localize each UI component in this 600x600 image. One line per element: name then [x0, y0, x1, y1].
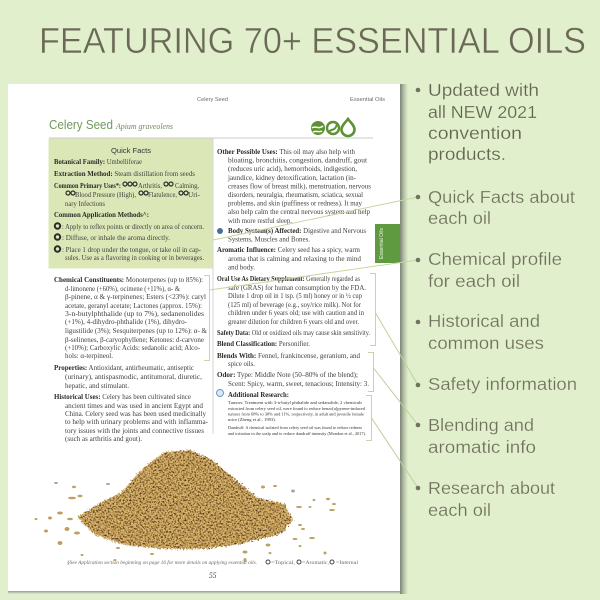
image: celery seed pile: [34, 450, 336, 562]
text block: additional research: Tumors: Treatment with 3-n-butyl phthalide and sedanolide, 2 chemicals: [228, 400, 362, 406]
footnote: =Internal: [336, 561, 359, 566]
text block: other possible uses and aromatic influence: with more restful sleep.: [228, 217, 292, 225]
text block: chemical constituents, properties, historical uses: (urinary), antispasmodic, antitumoral, diuretic,: [65, 373, 202, 381]
text block: oral use and safety: children under 6 years old; use with caution and in: [228, 309, 364, 317]
text block: blending and odor: [217, 352, 369, 388]
footnote: =Aromatic,: [302, 561, 329, 566]
bullet: quick facts: [416, 187, 575, 228]
panel: quick facts: : Place 1 drop under the tongue, or take oil in cap-: [62, 246, 202, 254]
panel: quick facts: Arthritis,: [138, 182, 162, 190]
icon: body systems: [217, 228, 223, 234]
text block: other possible uses and aromatic influence: problems, and skin (puffiness or redness). It may: [228, 200, 362, 208]
oil name heading: Celery Seed: [49, 118, 113, 132]
text block: additional research: extracted from celery seed oil, were found to reduce benzo[a]pyrene-induced: [228, 406, 366, 412]
text block: other possible uses and aromatic influence: creases flow of breast milk), menstruation, nervous: [228, 182, 371, 190]
bullet: chemical profile: Chemical profile: [428, 249, 562, 269]
brackets and callout lines: [204, 197, 418, 488]
bullet list: [416, 80, 577, 520]
bullet: blending: aromatic info: [428, 437, 536, 457]
panel: quick facts: Quick Facts: [111, 148, 152, 155]
text block: other possible uses and aromatic influence: disorders, neuralgia, rheumatism, sciatica, sexual: [228, 191, 363, 199]
text block: chemical constituents, properties, historical uses: d-limonene (+60%), ocimene (+11%), α- &: [65, 285, 180, 293]
tab: essential oils: Essential Oils: [379, 228, 385, 259]
text block: chemical constituents, properties, historical uses: hepatic, and stimulant.: [65, 382, 129, 390]
text block: chemical constituents, properties, historical uses: Chemical Constituents: Monoterpenes (up to 85%):: [54, 276, 203, 284]
bullet: research: [416, 478, 555, 520]
text block: chemical constituents, properties, historical uses: (+1%), 4-dihydro-phthalide (1%), dihydro-: [65, 318, 188, 326]
text block: additional research: Dandruff: A chemical isolated from celery seed oil was found to reduce redness: [228, 425, 362, 430]
text block: other possible uses and aromatic influence: Aromatic Influence: Celery seed has a spicy, warm: [217, 246, 360, 254]
title: FEATURING 70+ ESSENTIAL OILS: [39, 20, 586, 61]
text block: other possible uses and aromatic influence: Systems, Muscles and Bones.: [228, 236, 310, 244]
text block: additional research: mice (Zheng et al., 1993).: [228, 417, 276, 423]
scattered seeds: [34, 482, 336, 562]
bullet: quick facts: each oil: [428, 208, 491, 228]
icon: inline use badges: [66, 182, 188, 195]
text block: other possible uses and aromatic influence: jaundice, kidney detoxification, lactation (in-: [227, 174, 357, 182]
panel: quick facts: [48, 138, 212, 268]
panel: quick facts: Uri-: [188, 191, 201, 199]
bullet: historical uses: [416, 311, 544, 353]
panel: quick facts: Extraction Method: Steam distillation from seeds: [54, 170, 195, 178]
bullet: updated: convention: [428, 123, 522, 143]
bullet: research: Research about: [428, 478, 555, 498]
text block: chemical constituents, properties, historical uses: 3-n-butylphthalide (up to 7%), sedanenolides: [65, 310, 204, 318]
bullet: chemical profile: [416, 249, 562, 291]
text block: blending and odor: Odor: Type: Middle Note (50–80% of the blend);: [217, 371, 358, 379]
tab: essential oils: [375, 224, 400, 263]
text block: chemical constituents, properties, historical uses: Properties: Antioxidant, antirheumatic, antiseptic: [54, 364, 194, 372]
text block: oral use and safety: (125 ml) of beverage (e.g., soy/rice milk). Not for: [228, 301, 362, 309]
panel: quick facts: Common Application Methods^:: [54, 211, 149, 219]
icon: application method keys: [55, 223, 60, 252]
text block: chemical constituents, properties, historical uses: (+10%); Carboxylic Acids: sedanolic acid; Alco-: [65, 344, 201, 352]
text block: additional research: [216, 390, 366, 437]
bullet: updated: products.: [428, 144, 506, 164]
text block: chemical constituents, properties, historical uses: acetate, geranyl acetate; Lactones (approx. 15%):: [65, 302, 202, 310]
text block: oral use and safety: safe (GRAS) for human consumption by the FDA.: [228, 284, 366, 292]
panel: quick facts: Common Primary Uses*:: [54, 182, 121, 190]
footnote: =Topical,: [271, 561, 295, 566]
text block: other possible uses and aromatic influence: also help calm the central nervous system and help: [228, 208, 370, 216]
text block: chemical constituents, properties, historical uses: China. Celery seed was has been used medicinally: [65, 410, 206, 418]
text block: chemical constituents, properties, historical uses: tory issues with the joints and connective tissues: [65, 427, 204, 435]
text block: additional research: Additional Research:: [228, 391, 289, 399]
footnote: §See Application section beginning on page 16 for more details on applying essential oils.: [67, 561, 257, 566]
text block: chemical constituents, properties, historical uses: (such as arthritis and gout).: [65, 435, 142, 443]
panel: quick facts: sules. Use as a flavoring in cooking or in beverages.: [65, 254, 204, 262]
panel: quick facts: Blood Pressure (High),: [75, 191, 136, 199]
bullet: historical uses: Historical and: [428, 311, 540, 331]
bullet: updated: Updated with: [428, 80, 539, 100]
text block: additional research: and irritation in the scalp and to reduce dandruff intensity (Mondon et al., 2017).: [228, 431, 366, 437]
text block: blending and odor: Blends With: Fennel, frankincense, geranium, and: [217, 352, 360, 360]
text block: chemical constituents, properties, historical uses: Historical Uses: Celery has been cultivated since: [54, 393, 191, 401]
text block: oral use and safety: Dilute 1 drop oil in 1 tsp. (5 ml) honey or in ½ cup: [228, 292, 362, 300]
panel: quick facts: : Apply to reflex points or directly on area of concern.: [62, 223, 204, 231]
text block: chemical constituents, properties, historical uses: ancient times and was used in ancient Egypt and: [65, 402, 203, 410]
bullet: blending: Blending and: [428, 415, 534, 435]
text block: chemical constituents, properties, historical uses: β-selinenes, β-caryophyllene; Ketones: d-carvone: [65, 336, 204, 344]
bullet: blending: [416, 415, 536, 457]
text block: other possible uses and aromatic influence: [217, 148, 371, 272]
text block: chemical constituents, properties, historical uses: [54, 276, 209, 443]
bullet: updated: all NEW 2021: [428, 102, 537, 122]
page running header: [197, 97, 385, 103]
text block: chemical constituents, properties, historical uses: ligustilide (3%); Sesquiterpenes (up to 12%): α- &: [65, 327, 207, 335]
text block: chemical constituents, properties, historical uses: to help with urinary problems and with inflamma-: [65, 418, 209, 426]
panel: quick facts: nary Infections: [65, 200, 105, 208]
text block: other possible uses and aromatic influence: aroma that is calming and relaxing to the mind: [228, 255, 361, 263]
text block: oral use and safety: [217, 275, 370, 348]
oil name heading: [49, 118, 174, 132]
page running header: Celery Seed: [197, 97, 228, 103]
text block: chemical constituents, properties, historical uses: hols: α-terpineol.: [65, 352, 113, 360]
bullet: research: each oil: [428, 500, 491, 520]
panel: book page: [8, 84, 408, 594]
text block: oral use and safety: Blend Classification: Personifier.: [217, 340, 310, 348]
text block: other possible uses and aromatic influence: and body.: [228, 264, 255, 272]
text block: blending and odor: Scent: Spicy, warm, sweet, tenacious; Intensity: 3.: [228, 380, 369, 388]
footnote: [67, 560, 359, 566]
icon: application method badges: [311, 119, 354, 136]
text block: additional research: tumors from 68% to 30% and 11%, respectively, in adult and juvenile female: [228, 412, 364, 418]
text block: oral use and safety: Safety Data: Old or oxidized oils may cause skin sensitivity.: [217, 329, 370, 337]
text block: chemical constituents, properties, historical uses: β-pinene, α & γ-terpinenes; Esters (<23%): caryl: [65, 293, 206, 301]
panel: quick facts: Calming,: [175, 182, 199, 190]
text block: other possible uses and aromatic influence: Other Possible Uses: This oil may also help with: [217, 148, 355, 156]
bullet: historical uses: common uses: [428, 333, 544, 353]
bullet: quick facts: Quick Facts about: [428, 187, 575, 207]
text block: oral use and safety: Oral Use As Dietary Supplement: Generally regarded as: [217, 275, 360, 283]
page number: 55: [209, 571, 216, 580]
panel: quick facts: : Diffuse, or inhale the aroma directly.: [62, 234, 170, 242]
text block: oral use and safety: greater dilution for children 6 years old and over.: [228, 318, 359, 326]
panel: quick facts: Flatulence,: [148, 191, 177, 199]
text block: other possible uses and aromatic influence: (reduces uric acid), hemorrhoids, indigestion,: [228, 165, 357, 173]
text block: blending and odor: spice oils.: [228, 360, 255, 368]
page running header: Essential Oils: [350, 97, 385, 103]
bullet: updated: [416, 80, 539, 164]
text block: other possible uses and aromatic influence: bloating, bronchitis, congestion, dandruff, gout: [228, 157, 367, 165]
panel: quick facts: Botanical Family: Umbelliferae: [54, 158, 142, 166]
bullet: safety: Safety information: [428, 374, 577, 394]
text block: other possible uses and aromatic influence: Body System(s) Affected: Digestive and Nervous: [228, 227, 366, 235]
oil name heading: Apium graveolens: [115, 121, 174, 131]
bullet: chemical profile: for each oil: [428, 271, 520, 291]
